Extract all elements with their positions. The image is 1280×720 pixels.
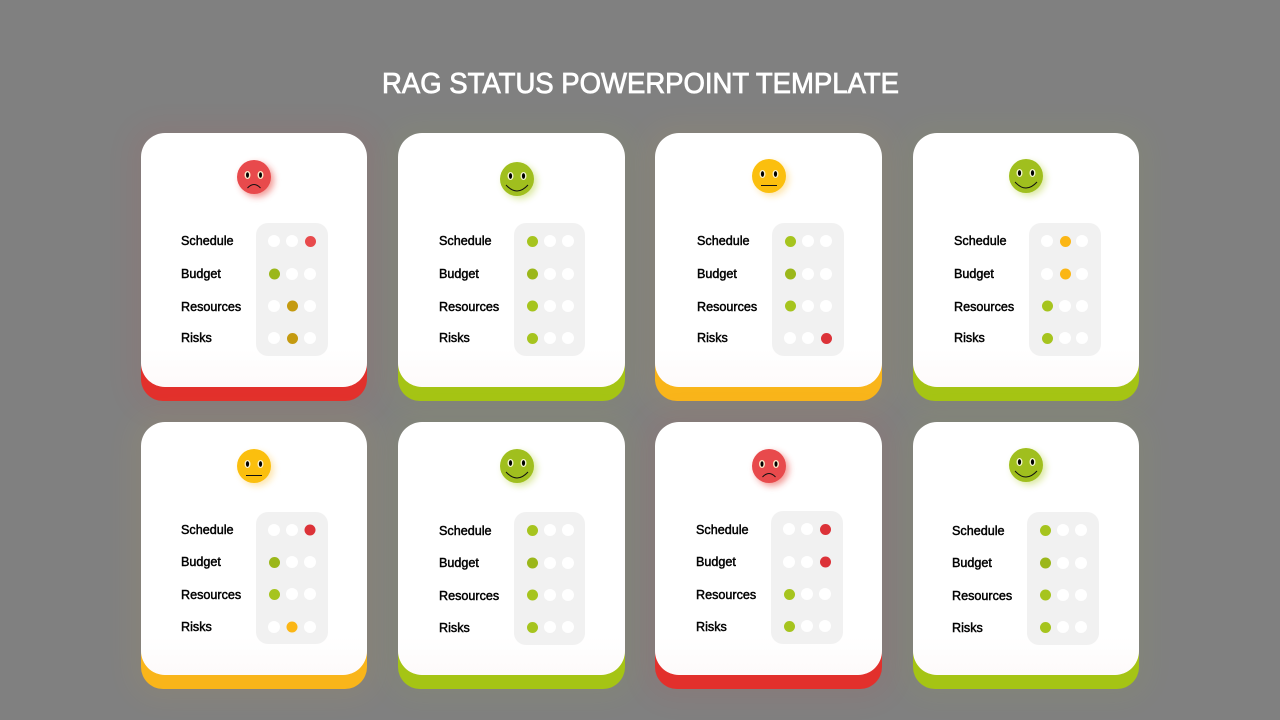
- status dot panel: [256, 223, 328, 356]
- icon: sad face: [237, 160, 274, 197]
- status labels: Budget: [439, 556, 479, 570]
- panel: card 8 green: [903, 414, 1149, 699]
- status labels: Risks: [697, 331, 728, 345]
- icon: happy face: [1009, 159, 1046, 196]
- status labels: Schedule: [696, 523, 749, 537]
- icon: happy face: [1009, 448, 1046, 485]
- status dot panel: [771, 511, 843, 644]
- status labels: Resources: [181, 300, 241, 314]
- status labels: Risks: [439, 331, 470, 345]
- status labels: Budget: [181, 555, 221, 569]
- status dot panel: [1027, 512, 1099, 645]
- status dot panel: [256, 512, 328, 644]
- status labels: Budget: [697, 267, 737, 281]
- status labels: Resources: [954, 300, 1014, 314]
- status labels: Resources: [439, 589, 499, 603]
- status labels: [439, 524, 499, 635]
- status labels: [696, 523, 756, 634]
- icon: neutral face: [752, 159, 789, 196]
- status labels: Schedule: [439, 234, 492, 248]
- panel: card 6 green: [388, 414, 635, 699]
- panel: card 4 green: [903, 125, 1149, 410]
- status labels: Schedule: [954, 234, 1007, 248]
- status labels: Budget: [952, 556, 992, 570]
- status dot panel: [772, 223, 844, 356]
- status labels: [697, 234, 757, 345]
- status labels: Risks: [696, 620, 727, 634]
- icon: sad face: [752, 449, 789, 486]
- status labels: Risks: [181, 331, 212, 345]
- panel: card 3 amber: [645, 125, 892, 410]
- status labels: [952, 524, 1012, 635]
- status labels: Schedule: [697, 234, 750, 248]
- status labels: [181, 523, 241, 634]
- panel: card 2 green: [388, 125, 635, 410]
- status labels: Budget: [696, 555, 736, 569]
- icon: happy face: [500, 162, 537, 199]
- status dot panel: [1029, 223, 1101, 356]
- status labels: [439, 234, 499, 345]
- status labels: Schedule: [181, 523, 234, 537]
- status labels: Schedule: [952, 524, 1005, 538]
- panel: card 1 red: [131, 125, 377, 410]
- panel: card 5 amber: [131, 414, 377, 699]
- status labels: Resources: [697, 300, 757, 314]
- status labels: Risks: [952, 621, 983, 635]
- status labels: Schedule: [181, 234, 234, 248]
- status labels: Risks: [954, 331, 985, 345]
- panel: card 7 red: [645, 414, 892, 699]
- status labels: [954, 234, 1014, 345]
- status labels: Budget: [439, 267, 479, 281]
- status dot panel: [514, 512, 585, 645]
- status labels: Risks: [439, 621, 470, 635]
- status labels: Resources: [696, 588, 756, 602]
- status labels: [181, 234, 241, 345]
- status labels: Resources: [181, 588, 241, 602]
- status labels: Schedule: [439, 524, 492, 538]
- icon: happy face: [500, 449, 537, 486]
- title: RAG STATUS POWERPOINT TEMPLATE: [382, 68, 899, 100]
- status labels: Budget: [181, 267, 221, 281]
- status labels: Budget: [954, 267, 994, 281]
- status labels: Risks: [181, 620, 212, 634]
- icon: neutral face: [237, 449, 274, 486]
- status labels: Resources: [952, 589, 1012, 603]
- status dot panel: [514, 223, 585, 356]
- status labels: Resources: [439, 300, 499, 314]
